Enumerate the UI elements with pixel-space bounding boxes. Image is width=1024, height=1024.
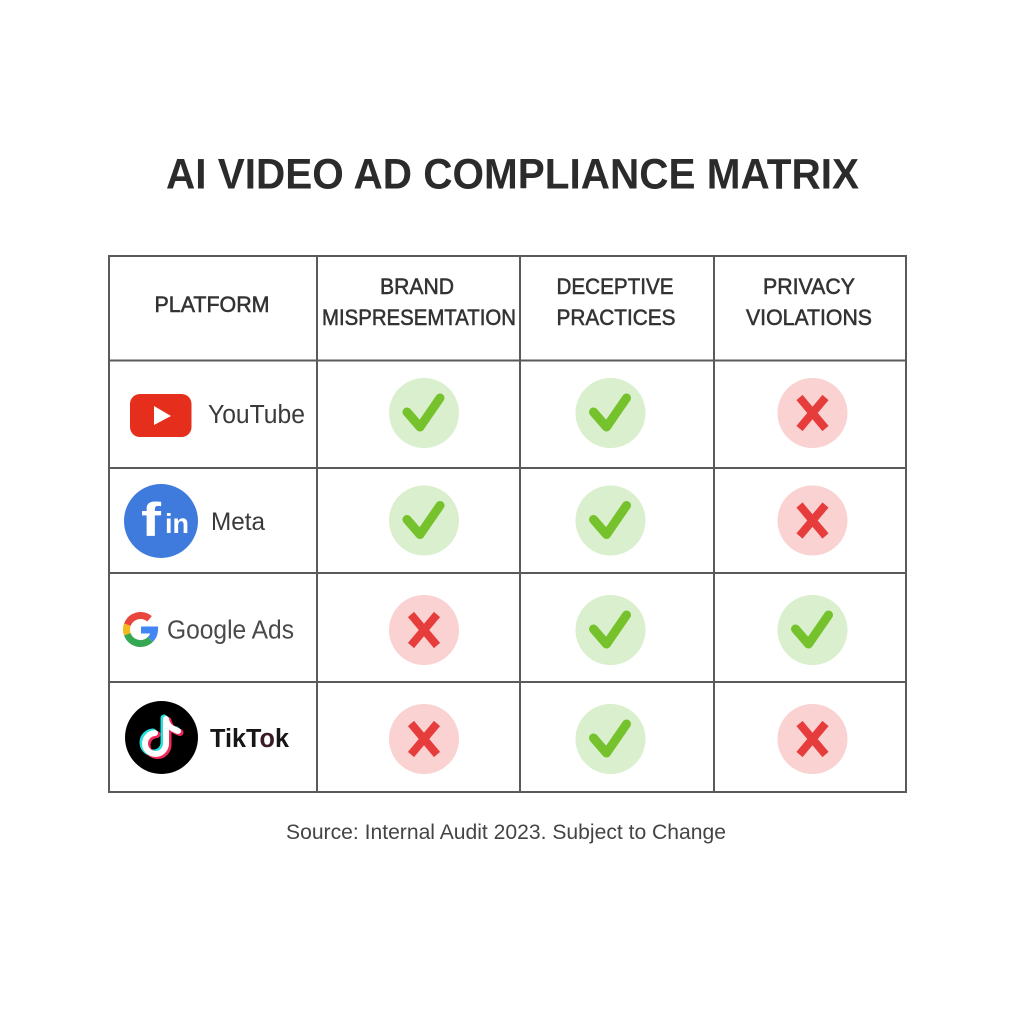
header: deceptive practices <box>556 274 676 330</box>
table grid <box>109 256 906 792</box>
title: AI VIDEO AD COMPLIANCE MATRIX <box>166 150 859 198</box>
status: TikTok deceptive - pass <box>576 704 646 774</box>
icon: Meta <box>124 484 198 558</box>
label: YouTube: YouTube <box>208 401 305 429</box>
status: Meta brand - pass <box>389 486 459 556</box>
status: Google privacy - pass <box>778 595 848 665</box>
icon: Google G <box>126 615 154 644</box>
header: deceptive practices: DECEPTIVE <box>556 274 674 299</box>
header: privacy violations <box>746 274 872 330</box>
row: TikTok <box>125 701 290 774</box>
status: YouTube brand - pass <box>389 378 459 448</box>
header: brand misrepresentation: BRAND <box>380 274 454 299</box>
source note: Source: Internal Audit 2023. Subject to Change <box>286 820 726 844</box>
row: Google Ads <box>126 615 294 644</box>
header: platform: PLATFORM <box>154 292 270 317</box>
status: YouTube deceptive - pass <box>576 378 646 448</box>
label: Meta: Meta <box>211 508 265 536</box>
header row <box>154 274 872 330</box>
row: YouTube <box>130 394 305 437</box>
header: brand misrepresentation: MISPRESEMTATION <box>322 305 516 330</box>
status: Meta privacy - fail <box>778 486 848 556</box>
icon: TikTok <box>125 701 198 774</box>
label: TikTok: TikTok <box>210 725 290 753</box>
status: TikTok brand - fail <box>389 704 459 774</box>
icon: YouTube <box>130 394 192 437</box>
row: Meta <box>124 484 265 558</box>
label: Google Ads: Google Ads <box>167 616 294 644</box>
status: TikTok privacy - fail <box>778 704 848 774</box>
status: YouTube privacy - fail <box>778 378 848 448</box>
icon: Meta: in <box>165 508 189 539</box>
header: privacy violations: VIOLATIONS <box>746 305 872 330</box>
icon: Meta: f <box>141 493 161 546</box>
header: deceptive practices: PRACTICES <box>556 305 676 330</box>
header: brand misrepresentation <box>322 274 516 330</box>
header: privacy violations: PRIVACY <box>763 274 855 299</box>
status: Google brand - fail <box>389 595 459 665</box>
status: Meta deceptive - pass <box>576 486 646 556</box>
status: Google deceptive - pass <box>576 595 646 665</box>
